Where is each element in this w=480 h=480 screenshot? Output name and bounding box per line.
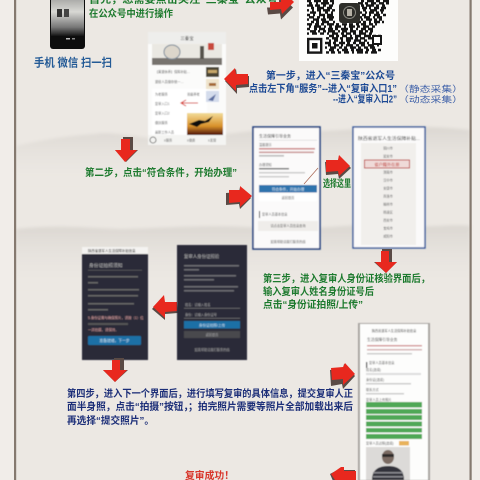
screenshot: eligibility page: 符合条件，开始办理 [272, 186, 305, 192]
screenshot: region list: 省户籍外在册 [374, 161, 400, 168]
screenshot: ID photo notice: 身份证拍照须知 [89, 262, 123, 269]
screenshot: region list: 杨凌区 [383, 210, 394, 214]
screenshot: region list: 宝鸡市 [383, 226, 394, 230]
screenshot: region list: 延安市 [383, 154, 394, 158]
screenshot: eligibility page: 温馨提示 [259, 142, 272, 147]
arrow: step four right [330, 363, 355, 389]
WeChat account screenshot [148, 32, 226, 145]
WeChat account screenshot: 缴扶服务 [155, 120, 169, 125]
WeChat account screenshot: 【离退休养】保障补贴… [155, 69, 190, 74]
WeChat account screenshot: 复审入口1 [155, 101, 170, 106]
arrow: down to step three [374, 249, 397, 273]
screenshot: eligibility page: 如需帮助请拨打服务热线 [270, 239, 306, 244]
WeChat account screenshot: 为老服务 [155, 92, 169, 96]
step three text: 输入复审人姓名身份证号后 [263, 285, 374, 298]
screenshot: ID photo notice: 陕西省退军人生活保障补贴信息 [88, 248, 136, 253]
screenshot: reviewer ID form: 身份：请输入身份证号 [185, 312, 217, 317]
screenshot: detailed information form: 复审人员基本信息 [369, 360, 394, 365]
screenshot: eligibility page [253, 127, 320, 249]
step one text: （动态采集） [398, 94, 463, 104]
screenshot: ID photo notice [82, 247, 148, 360]
screenshot: region list: 汉中市 [383, 178, 394, 182]
QR code [299, 0, 398, 61]
screenshot: region list: 商洛市 [383, 194, 394, 198]
WeChat account screenshot: ≡缴费 [187, 138, 195, 142]
select-here note: 选择这里 [323, 177, 351, 190]
screenshot: detailed information form: 复审人员上传照片 [366, 397, 392, 402]
intro text: 在公众号中进行操作 [89, 7, 173, 20]
screenshot: detailed information form: 身份证(选填) [366, 377, 384, 382]
arrow: to region list [325, 155, 351, 179]
screenshot: region list: 陕西省退军人生活保障补贴... [358, 135, 420, 142]
step one text: --进入“复审入口2” [333, 92, 397, 106]
step three text: 点击“身份证拍照/上传” [263, 298, 363, 311]
step three text [263, 272, 430, 311]
screenshot: eligibility page: 复审人员基本信息 [262, 212, 288, 216]
step four text: 第四步，进入下一个界面后，进行填写复审的具体信息，提交复审人正 [67, 387, 353, 400]
screenshot: detailed information form: 陕西省退军人生活保障补贴信息 [372, 328, 416, 333]
screenshot: eligibility page: 请点击复审人员信息查询 [270, 223, 306, 228]
screenshot: detailed information form: 姓名(选填) [366, 367, 381, 372]
screenshot: region list: 安康市 [383, 186, 394, 190]
step one text [249, 69, 463, 106]
WeChat account screenshot: 复审入口2 [155, 110, 170, 116]
WeChat account screenshot: 省级养老 [187, 92, 201, 96]
step one text: （静态采集） [398, 83, 463, 94]
screenshot: detailed information form [358, 323, 430, 480]
screenshot: reviewer ID form: 身份证拍照/上传 [199, 322, 225, 328]
screenshot: region list: 铜川市 [383, 146, 394, 150]
screenshot: eligibility page: 生活保障引导业务 [259, 132, 291, 138]
screenshot: eligibility page: 返回首页 [282, 195, 294, 200]
pointer line to blue button [304, 168, 318, 184]
screenshot: region list [353, 127, 425, 248]
screenshot: reviewer ID form: 复审人身份证照验 [184, 253, 220, 260]
step two text: 第二步，点击“符合条件，开始办理” [85, 166, 237, 179]
WeChat account screenshot: 最新工作人员 [155, 130, 174, 134]
screenshot: region list: 渭南市 [383, 170, 394, 174]
intro text [89, 0, 289, 20]
step four text: 面半身照，点击“拍摄”按钮，；拍完照片需要等照片全部加载出来后 [67, 400, 353, 413]
arrow: to success [330, 467, 356, 480]
step one text: 第一步，进入“三秦宝”公众号 [266, 69, 395, 82]
screenshot: eligibility page: 办理须知 [259, 162, 272, 167]
step four text: 再选择“提交照片”。 [67, 414, 154, 427]
screenshot: ID photo notice: 一并拍摄，请保持。 [88, 327, 119, 332]
phone illustration [50, 0, 85, 49]
WeChat account screenshot: 三秦宝 [180, 35, 194, 42]
screenshot: region list: 榆林市 [383, 202, 394, 206]
arrow: step three left [152, 295, 178, 320]
screenshot: ID photo notice: 5.身份证需与确保照片，请按（1）位 [88, 315, 144, 320]
step four text [67, 387, 353, 427]
screenshot: reviewer ID form: 姓名：请输入姓名 [185, 302, 210, 307]
arrow: down to step two [115, 137, 138, 162]
arrow: down to step four [103, 358, 128, 382]
screenshot: detailed information form: 复审人员近照(选填) [366, 440, 394, 446]
arrow: step one left [224, 68, 249, 94]
step three text: 第三步，进入复审人身份证核验界面后， [263, 272, 430, 285]
screenshot: reviewer ID form: 返回首页 [206, 332, 218, 337]
WeChat account screenshot: ≡发现 [208, 138, 217, 142]
WeChat account screenshot: 退役人员缴存统一… [155, 79, 184, 84]
step one text: 点击左下角“服务”--进入“复审入口1” [249, 82, 397, 95]
screenshot: ID photo notice: 准备就绪，下一步 [99, 338, 130, 343]
phone caption: 手机 微信 扫一扫 [34, 56, 112, 70]
screenshot: detailed information form: 联系方式 [366, 387, 380, 392]
arrow: step two right [226, 186, 252, 209]
screenshot: reviewer ID form [177, 245, 247, 360]
screenshot: region list: 西安市 [383, 218, 394, 222]
screenshot: detailed information form: 生活保障引导业务 [367, 337, 398, 342]
arrow: to QR code [267, 0, 294, 20]
WeChat account screenshot: ≡服务 [164, 138, 173, 142]
screenshot: region list: 咸阳市 [383, 234, 394, 238]
screenshot: reviewer ID form: 如需帮助请拨打服务热线 [194, 347, 230, 352]
